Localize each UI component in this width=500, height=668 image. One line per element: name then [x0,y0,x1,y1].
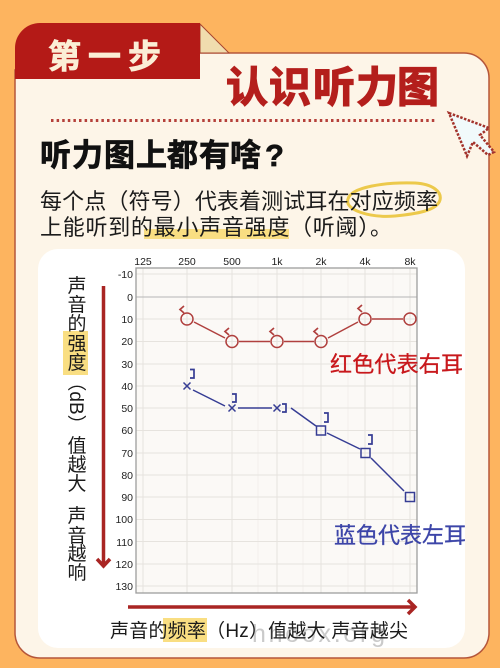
dotted divider [51,119,436,122]
x axis caption: 声音的频率（Hz）值越大 声音越尖 [110,620,408,642]
intensity labels: 130 [115,581,133,593]
intensity labels: 30 [121,359,133,371]
frequency labels: 4k [359,256,371,268]
frequency labels: 2k [315,256,327,268]
y axis caption: 大 [67,473,87,495]
heading: 听力图上都有啥? [40,138,284,173]
y axis caption: 强 [67,334,87,355]
watermark: hnoox.org [252,620,385,648]
frequency labels: 125 [134,256,152,268]
panel: white chart area [38,249,465,648]
intensity labels: -10 [118,269,133,281]
intensity labels: 60 [121,425,133,437]
intensity labels: 40 [121,381,133,393]
intensity labels: 120 [115,559,133,571]
frequency labels [134,256,416,268]
step label: 第一步 [48,38,161,75]
intensity labels: 10 [121,314,133,326]
intensity labels: 110 [116,537,133,549]
step tab [15,23,200,79]
icon: pixel cursor [449,113,494,156]
arrow: intensity axis [97,286,110,566]
right ear data [180,305,416,348]
y axis caption: 声 [67,275,87,297]
intensity labels: 0 [127,292,133,304]
frequency labels: 250 [178,256,196,268]
intensity labels: 20 [121,336,133,348]
plot area [136,268,417,593]
body line 1: 每个点（符号）代表着测试耳在对应频率 [40,189,438,214]
highlight: frequency [163,618,207,642]
y axis caption: 越 [67,454,87,476]
intensity labels: 90 [121,492,133,504]
intensity labels [115,269,133,593]
audiogram chart [115,256,417,593]
page fold [200,24,229,53]
y axis caption: 音 [67,525,87,547]
y axis caption: 值 [67,435,87,457]
body line 2: 上能听到的最小声音强度（听阈）。 [40,215,392,240]
title: 认识听力图 [226,64,439,111]
highlight: phrase underline [144,229,289,239]
arrow: frequency axis [128,600,415,614]
body text [40,189,438,240]
y axis caption [65,275,87,584]
y axis caption: 响 [67,562,87,584]
intensity labels: 70 [121,448,133,460]
left ear data [184,370,414,502]
highlight: intensity [63,331,88,375]
intensity labels: 50 [121,403,133,415]
highlight: circle around phrase [348,183,440,216]
y axis caption: 越 [67,543,87,565]
y axis caption: 的 [67,313,87,335]
y axis caption: （dB） [65,372,87,434]
right ear legend: 红色代表右耳 [330,352,463,377]
frequency labels: 8k [404,256,416,268]
left ear legend: 蓝色代表左耳 [334,523,466,548]
intensity labels: 80 [121,470,133,482]
y axis caption: 声 [67,505,87,527]
intensity labels: 100 [115,514,133,526]
frequency labels: 500 [223,256,241,268]
y axis caption: 音 [67,294,87,316]
y axis caption: 度 [67,352,87,374]
frequency labels: 1k [271,256,283,268]
